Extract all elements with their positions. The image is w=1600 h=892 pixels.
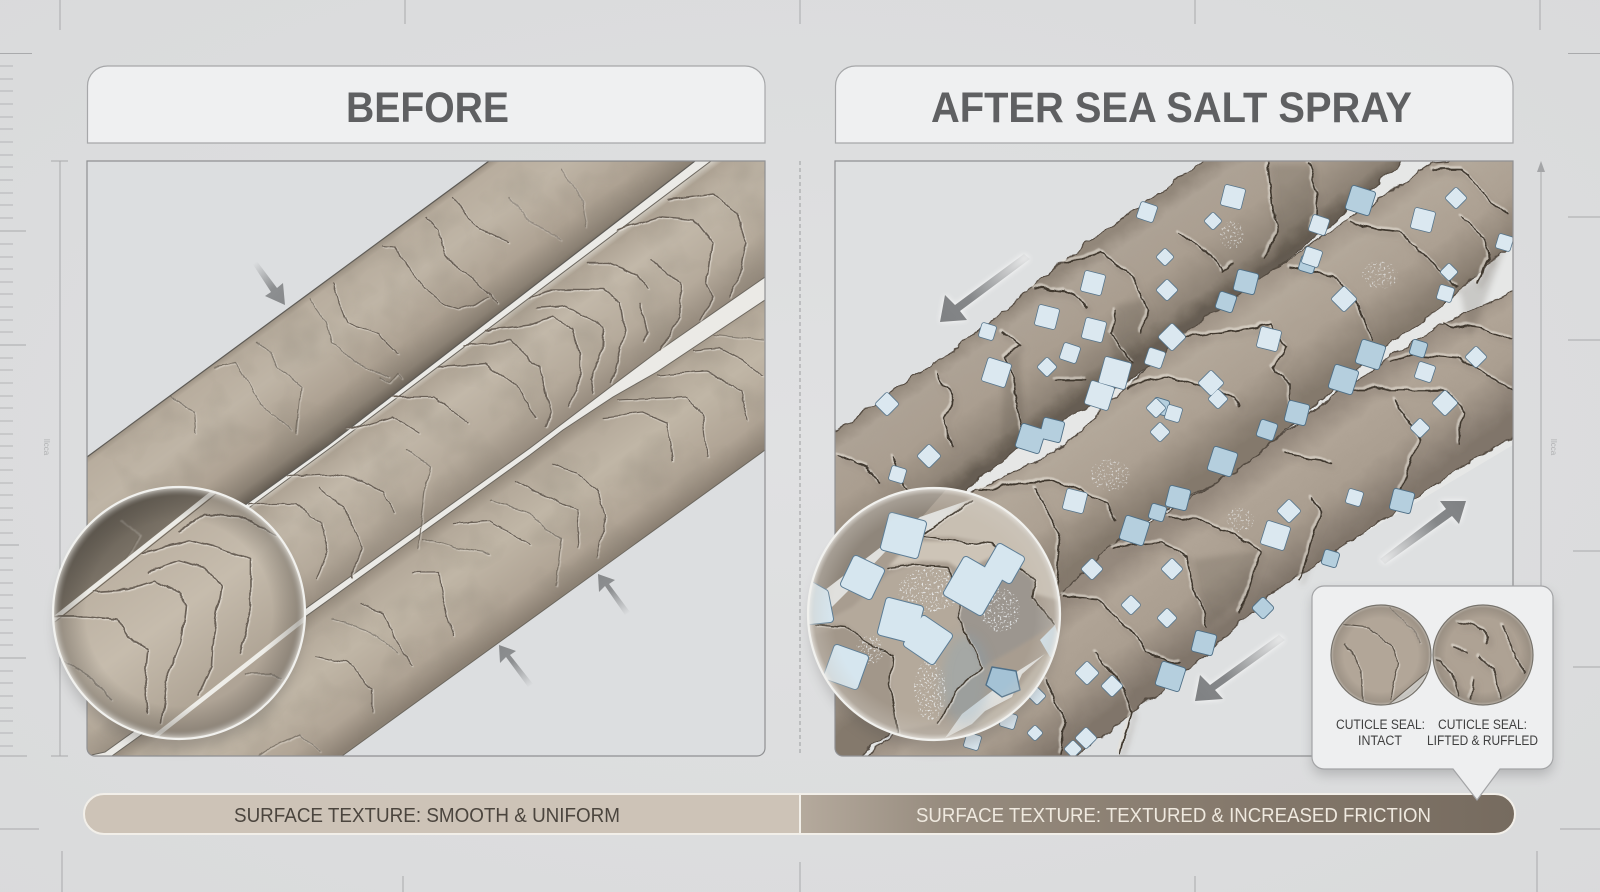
heading: before [88,66,765,143]
heading: after sea salt spray [836,66,1513,143]
heading: after sea salt spray: AFTER SEA SALT SPRAY [931,84,1412,132]
panel: after, rough hair strands with salt [828,155,1525,780]
hair strand bodies [87,161,780,760]
heading: before: BEFORE [346,84,509,132]
close-up dust [856,568,1020,720]
cuticle flap shading bands [1000,165,1510,630]
arrow: direction friction lower [1195,635,1285,701]
arrow: surface pointer right [598,574,630,615]
salt crystals in the gaps [1018,188,1425,689]
callout label: lifted and ruffled: LIFTED & RUFFLED [1427,733,1538,748]
close-up shaded upper strand [814,490,944,589]
cuticle detail circle: intact [1331,605,1432,706]
panel: before, smooth hair strands [87,161,780,760]
close-up flap creases [815,500,1055,731]
arrow: direction friction right [1380,501,1466,564]
ruffled hair strand bodies [828,155,1525,780]
callout label: intact: CUTICLE SEAL: [1336,717,1425,732]
close-up lower pale gap [945,654,1045,738]
close-up salt crystals [810,516,1065,697]
tiny ruler label right: Ilcca [1549,439,1558,456]
bar: surface texture after [800,794,1515,834]
magnifier: before close-up [50,485,312,749]
cuticle crack lines [173,168,763,760]
callout label: intact: INTACT [1358,733,1402,748]
magnifier: after close-up [805,485,1065,750]
callout label: lifted and ruffled: CUTICLE SEAL: [1438,717,1527,732]
salt dust specks [1090,221,1398,532]
bar: surface texture after: SURFACE TEXTURE: TEXTURED & INCREASED FRICTION [916,804,1431,827]
tiny ruler label left: Ilcca [42,439,51,456]
bar: surface texture before: SURFACE TEXTURE: SMOOTH & UNIFORM [234,804,620,827]
arrow: surface pointer lower [499,645,533,687]
close-up cuticle flaps [832,498,1058,728]
close-up pale gaps [825,498,975,607]
cuticle detail circle: lifted [1433,605,1533,705]
raised cuticle scale edges [836,163,1512,754]
bar: surface texture before [84,794,800,834]
arrow: direction friction upper left [940,254,1030,322]
close-up crack lines [54,514,281,723]
pale gaps between strands [835,161,1513,756]
arrow: surface pointer upper left [252,260,285,305]
salt crystals on the strands [878,187,1511,755]
close-up blue mineral tint [941,634,989,726]
callout: cuticle seal comparison [1312,586,1553,800]
